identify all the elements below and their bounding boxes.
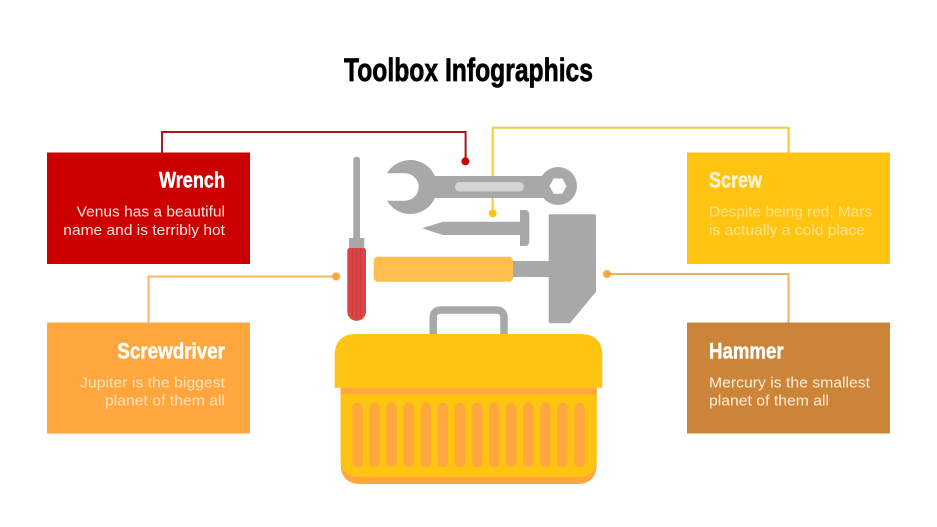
text: screwdriver description: planet of them all bbox=[105, 393, 225, 410]
icon: screw bbox=[422, 210, 529, 246]
text: screw description bbox=[709, 204, 872, 239]
text: screwdriver description bbox=[80, 374, 226, 410]
heading: screwdriver: Screwdriver bbox=[117, 339, 225, 364]
toolbox handle bbox=[433, 310, 504, 335]
connector: screwdriver bbox=[148, 272, 340, 323]
heading: screw: Screw bbox=[709, 168, 763, 193]
heading: hammer: Hammer bbox=[709, 339, 784, 364]
toolbox lid band bbox=[341, 388, 597, 394]
panel: screw bbox=[687, 152, 890, 264]
text: wrench description: name and is terribly hot bbox=[63, 222, 226, 239]
text: screw description: is actually a cold place bbox=[709, 222, 865, 239]
connector: screw bbox=[489, 128, 788, 217]
icon: hammer bbox=[374, 214, 596, 323]
icon: toolbox bbox=[335, 310, 602, 484]
title: Toolbox Infographics bbox=[344, 52, 593, 88]
icon: wrench bbox=[387, 160, 577, 214]
toolbox body bbox=[341, 387, 597, 484]
text: hammer description: planet of them all bbox=[709, 393, 829, 410]
text: hammer description bbox=[709, 374, 871, 410]
text: screw description: Despite being red, Mars bbox=[709, 204, 872, 220]
heading: wrench: Wrench bbox=[159, 168, 225, 193]
panel: screwdriver bbox=[47, 322, 250, 434]
toolbox lid bbox=[335, 334, 602, 388]
connector: hammer bbox=[603, 270, 788, 323]
connector: wrench bbox=[162, 132, 469, 165]
panel: hammer bbox=[687, 322, 890, 434]
text: wrench description: Venus has a beautiful bbox=[77, 204, 225, 220]
panel: wrench bbox=[47, 152, 250, 264]
text: wrench description bbox=[63, 204, 226, 239]
toolbox ribs bbox=[352, 403, 585, 467]
icon: screwdriver bbox=[347, 157, 366, 321]
text: hammer description: Mercury is the smallest bbox=[709, 374, 871, 391]
text: screwdriver description: Jupiter is the biggest bbox=[80, 374, 226, 391]
